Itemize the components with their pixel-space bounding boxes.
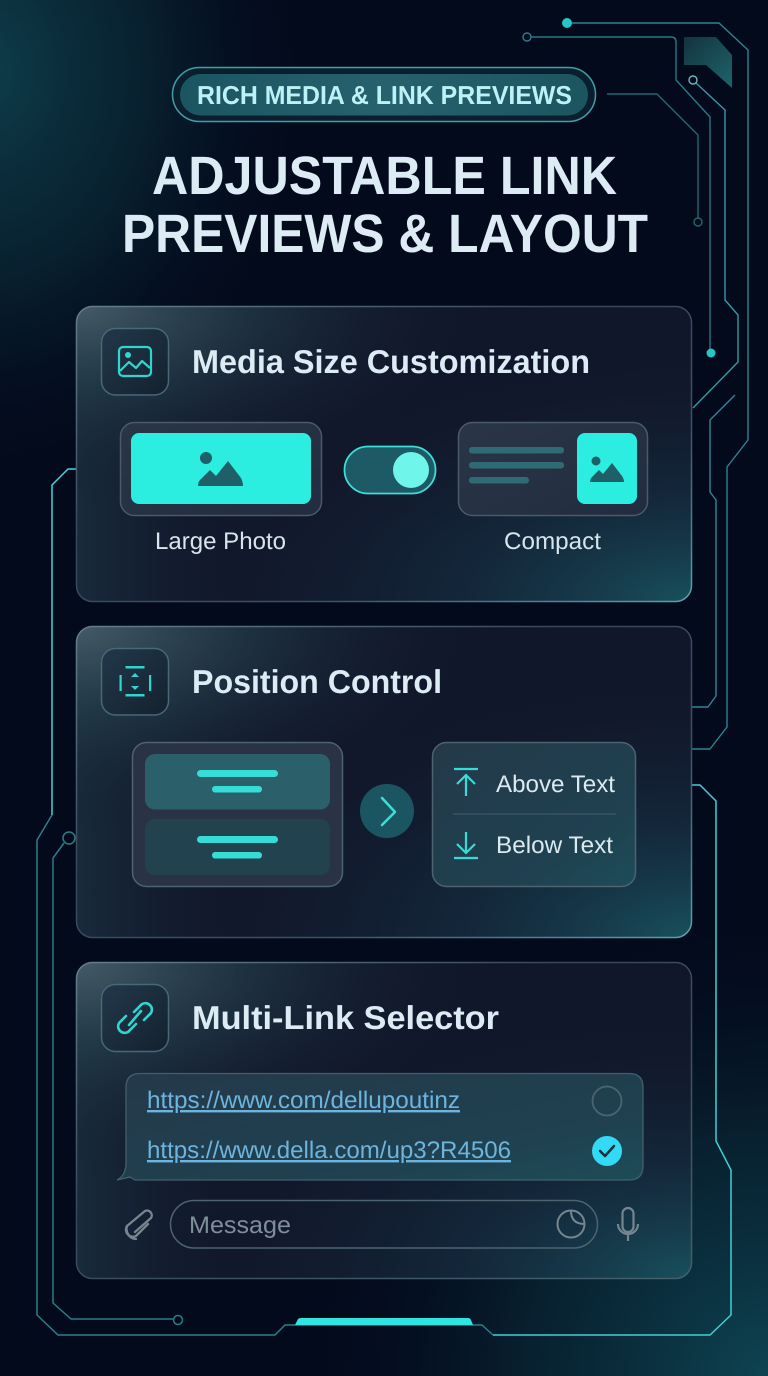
circuit traces: top right: [523, 18, 748, 749]
option: above text: Above Text: [496, 771, 615, 798]
option: below text: Below Text: [496, 832, 613, 859]
heading: Media Size Customization: [192, 343, 590, 380]
stacked layout preview: [132, 742, 342, 886]
panel: media size customization: [76, 306, 692, 602]
bottom glow bar: [295, 1318, 473, 1325]
label: large photo: Large Photo: [155, 528, 286, 555]
corner accent block: [684, 37, 732, 88]
message input: [170, 1200, 598, 1248]
heading: Multi-Link Selector: [192, 999, 499, 1036]
title: ADJUSTABLE LINK: [152, 146, 617, 206]
icon: arrow up: [454, 769, 478, 796]
icon: picture: [102, 328, 168, 395]
label: compact: Compact: [504, 528, 601, 555]
link two: https://www.della.com/up3?R4506: [147, 1137, 511, 1164]
arrow: next: [360, 784, 414, 838]
large photo preview: [120, 422, 322, 516]
compact preview: [458, 422, 648, 516]
badge: rich media and link previews: [172, 68, 596, 122]
icon: microphone: [618, 1208, 638, 1241]
toggle switch: [344, 446, 436, 494]
badge: rich media and link previews: RICH MEDIA & LINK PREVIEWS: [197, 80, 572, 110]
icon: arrow down: [454, 832, 478, 858]
circuit traces: left and bottom: [37, 469, 731, 1335]
radio: unselected: [592, 1086, 622, 1116]
link one: https://www.com/dellupoutinz: [147, 1087, 460, 1114]
title: [122, 146, 648, 264]
link chat bubble: [117, 1074, 643, 1180]
icon: alignment: [102, 648, 168, 715]
panel: position control: [76, 626, 692, 938]
panel: multi-link selector: [76, 962, 692, 1278]
radio: selected: [592, 1136, 622, 1166]
message input: Message: [189, 1212, 291, 1239]
icon: sticker: [558, 1210, 584, 1238]
icon: link: [102, 984, 168, 1052]
icon: paperclip: [126, 1211, 152, 1239]
title: PREVIEWS & LAYOUT: [122, 204, 648, 264]
heading: Position Control: [192, 663, 442, 700]
position options: [432, 742, 636, 886]
